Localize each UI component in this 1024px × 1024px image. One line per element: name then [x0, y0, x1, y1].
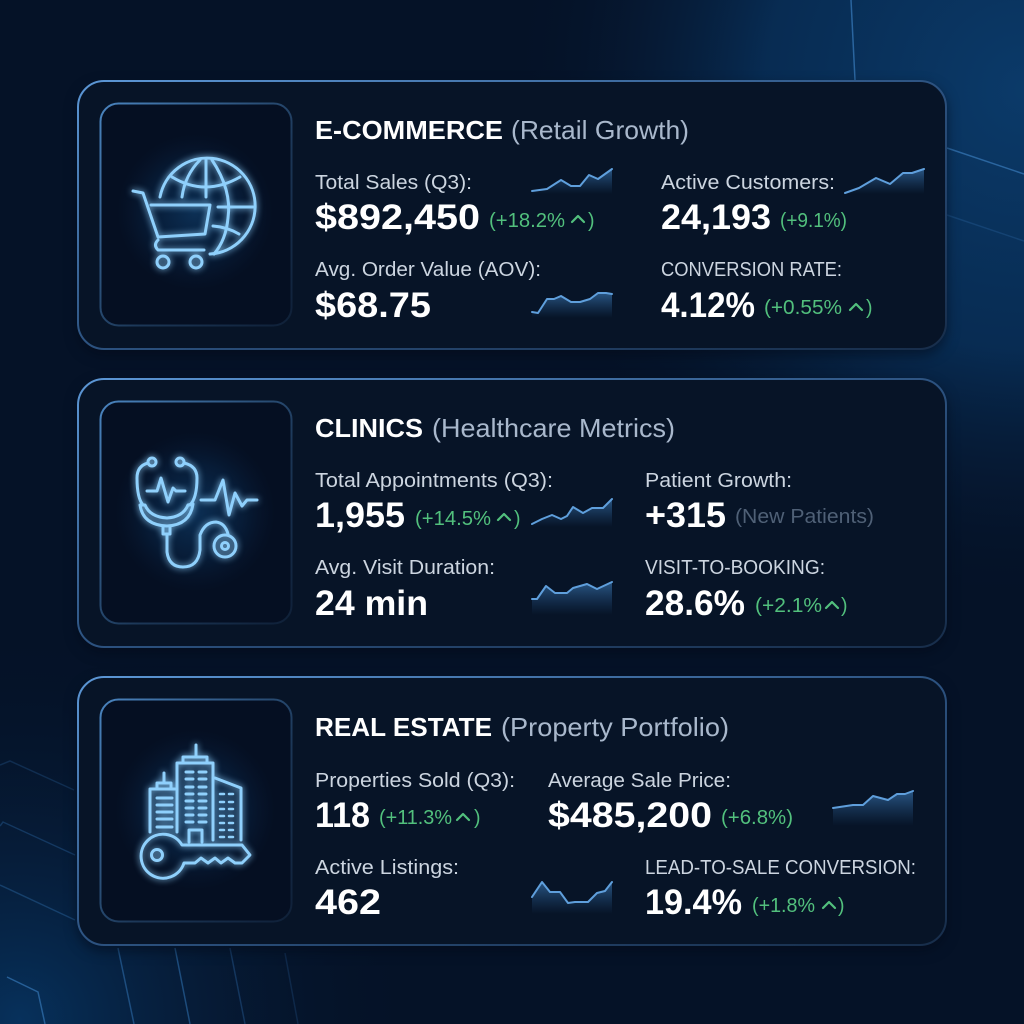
metric: average sale price: [548, 770, 793, 835]
metric: lead-to-sale conversion: [645, 857, 916, 922]
heading: clinics: [315, 413, 675, 443]
metric: total appointments: 1,955: [315, 496, 405, 535]
metric: patient growth: [645, 470, 874, 535]
icon tile: buildings and key: [100, 700, 292, 922]
metric: active customers: [661, 172, 847, 237]
heading: real estate: REAL ESTATE: [315, 712, 492, 742]
metric: patient growth: +315: [645, 496, 726, 535]
sparkline: average sale price: [833, 791, 913, 826]
metric: patient growth: Patient Growth:: [645, 470, 792, 492]
metric: visit-to-booking: VISIT-TO-BOOKING:: [645, 557, 825, 579]
sparkline: average visit duration: [532, 582, 612, 615]
metric: average sale price: (+6.8%): [721, 807, 793, 829]
metric: total appointments: (+14.5%: [415, 508, 491, 530]
metric: conversion rate: [661, 259, 872, 325]
sparkline: total sales: [532, 169, 612, 194]
metric: conversion rate: CONVERSION RATE:: [661, 259, 842, 281]
metric: patient growth: (New Patients): [735, 506, 874, 528]
metric: total appointments: ): [514, 508, 520, 530]
metric: average order value: Avg. Order Value (AOV):: [315, 259, 541, 281]
icon tile: shopping cart and globe: [100, 104, 292, 326]
heading: clinics: (Healthcare Metrics): [432, 413, 675, 443]
metric: active customers: (+9.1%): [780, 210, 847, 232]
metric: lead-to-sale conversion: (+1.8%: [752, 895, 815, 917]
heading: real estate: (Property Portfolio): [501, 712, 729, 742]
metric: visit-to-booking: ): [841, 595, 848, 617]
metric: total appointments: Total Appointments (Q3):: [315, 470, 553, 492]
panel: real estate: [78, 677, 946, 945]
metric: total sales: ): [588, 210, 594, 232]
heading: clinics: CLINICS: [315, 413, 423, 443]
metric: properties sold: ): [474, 807, 480, 829]
metric: average order value: [315, 259, 541, 325]
metric: active customers: 24,193: [661, 198, 771, 237]
metric: average sale price: $485,200: [548, 796, 712, 835]
metric: visit-to-booking: (+2.1%: [755, 595, 822, 617]
metric: properties sold: (+11.3%: [379, 807, 452, 829]
sparkline: active listings: [532, 882, 612, 914]
metric: total sales: [315, 172, 594, 237]
metric: lead-to-sale conversion: 19.4%: [645, 883, 742, 922]
metric: conversion rate: ): [866, 297, 872, 319]
heading: e-commerce: E-COMMERCE: [315, 115, 503, 145]
sparkline: average order value: [532, 293, 612, 318]
metric: total sales: $892,450: [315, 198, 480, 237]
metric: visit-to-booking: [645, 557, 848, 623]
metric: active listings: Active Listings:: [315, 857, 459, 879]
metric: average visit duration: Avg. Visit Duration:: [315, 557, 495, 579]
metric: properties sold: 118: [315, 796, 370, 835]
metric: average visit duration: 24 min: [315, 584, 428, 623]
metric: active customers: Active Customers:: [661, 172, 835, 194]
metric: conversion rate: (+0.55%: [764, 297, 842, 319]
icon tile: stethoscope and heartbeat: [100, 402, 292, 624]
sparkline: total appointments: [532, 499, 612, 527]
heading: e-commerce: (Retail Growth): [511, 115, 689, 145]
metric: average order value: $68.75: [315, 286, 431, 325]
metric: active listings: [315, 857, 459, 922]
metric: conversion rate: 4.12%: [661, 286, 755, 325]
heading: e-commerce: [315, 115, 689, 145]
metric: active listings: 462: [315, 883, 381, 922]
sparkline: active customers: [845, 169, 924, 194]
heading: real estate: [315, 712, 729, 742]
metric: average visit duration: [315, 557, 495, 623]
metric: lead-to-sale conversion: LEAD-TO-SALE CONVERSION:: [645, 857, 916, 879]
metric: average sale price: Average Sale Price:: [548, 770, 731, 792]
metric: lead-to-sale conversion: ): [838, 895, 844, 917]
metric: total sales: Total Sales (Q3):: [315, 172, 472, 194]
metric: properties sold: [315, 770, 515, 835]
metric: properties sold: Properties Sold (Q3):: [315, 770, 515, 792]
panel: clinics: [78, 379, 946, 647]
metric: total appointments: [315, 470, 553, 535]
panel: e-commerce: [78, 81, 946, 349]
metric: visit-to-booking: 28.6%: [645, 584, 745, 623]
metric: total sales: (+18.2%: [489, 210, 565, 232]
